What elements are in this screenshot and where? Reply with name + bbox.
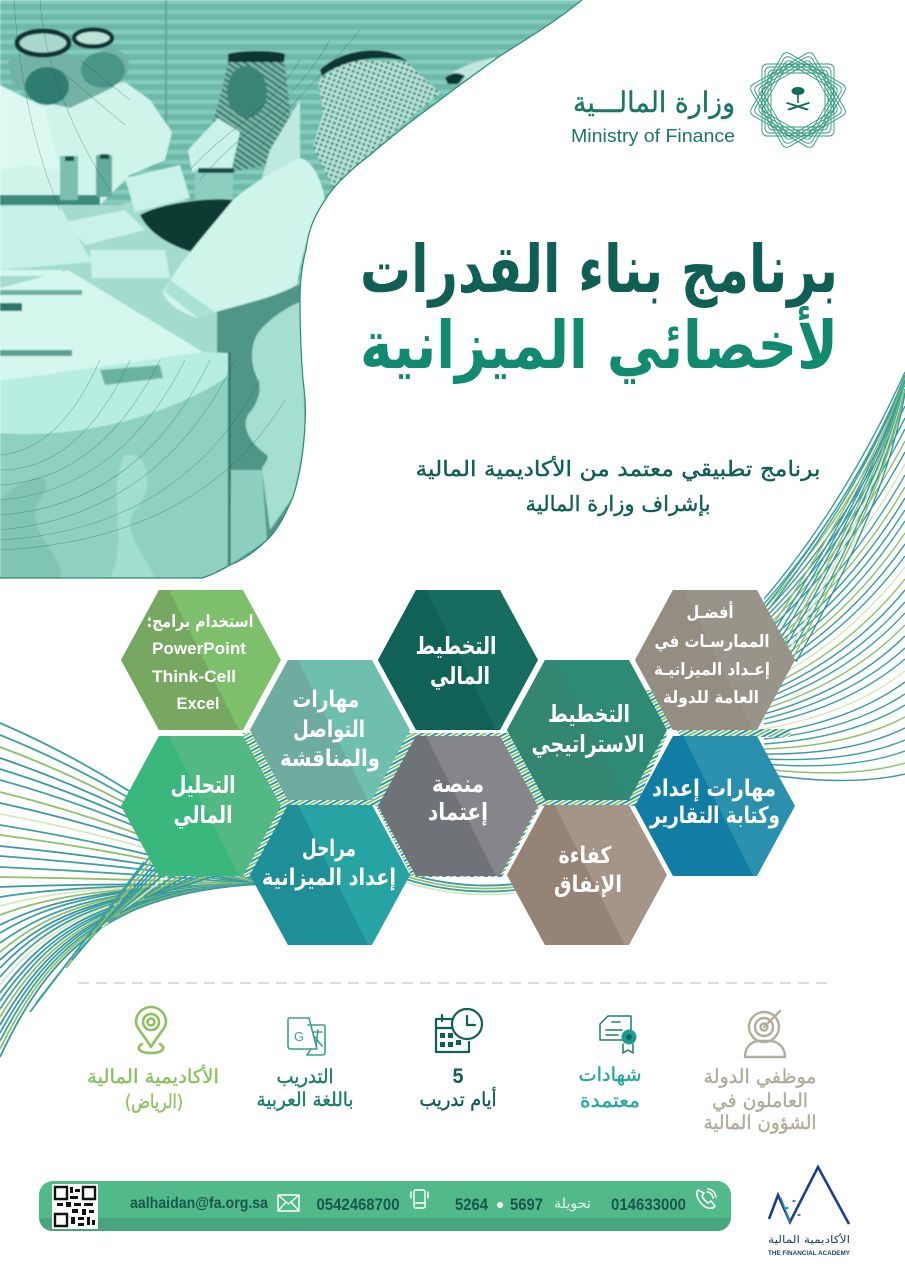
hexagon: best practices: العامة للدولة xyxy=(663,688,759,708)
chair back and dark gap xyxy=(217,285,307,575)
hexagon: strategic planning: التخطيط xyxy=(548,700,630,728)
chair shape xyxy=(246,302,305,530)
info: audience: الشؤون المالية xyxy=(704,1112,816,1134)
hexagon: best practices: إعـداد الميزانيـة xyxy=(654,660,770,680)
hexagon: strategic planning xyxy=(507,660,667,800)
logo: Financial Academy: THE FINANCIAL ACADEMY xyxy=(768,1250,851,1257)
info: duration: 5 xyxy=(452,1065,464,1088)
info: language: التدريب xyxy=(276,1066,334,1088)
icon: map pin xyxy=(136,1007,166,1053)
hexagon: best practices: أفضـل xyxy=(686,601,734,623)
thin overlay lines xyxy=(0,0,360,550)
bottles xyxy=(60,156,78,200)
hexagon: communication skills: والمناقشة xyxy=(280,746,380,772)
checked headdress xyxy=(313,60,440,187)
info: certificates: شهادات xyxy=(578,1064,642,1086)
hexagon: Etimad platform: منصة xyxy=(432,770,484,798)
palm and swords xyxy=(786,87,810,110)
hexagon: software: Excel xyxy=(176,694,220,713)
info: language: G xyxy=(294,1029,304,1044)
middle man xyxy=(212,60,290,172)
icon: calendar and clock xyxy=(436,1009,482,1052)
divider xyxy=(78,982,832,984)
info: audience xyxy=(704,1011,816,1134)
hexagon: budget stages: مراحل xyxy=(302,836,356,862)
icon: certificate xyxy=(600,1016,633,1053)
hexagon: best practices xyxy=(635,590,795,730)
hexagon: financial analysis: التحليل xyxy=(170,771,236,799)
mobile number: 0542468700 xyxy=(316,1195,400,1214)
icon: translate xyxy=(288,1018,325,1055)
Arabic name: وزارة المالـــية xyxy=(573,86,735,119)
info: location: (الرياض) xyxy=(125,1091,183,1113)
title xyxy=(360,231,838,384)
seated man's robe xyxy=(163,158,325,318)
hexagon: software: استخدام برامج: xyxy=(146,612,254,632)
hexagon: report writing: مهارات إعداد xyxy=(652,776,776,802)
landline number: 014633000 xyxy=(611,1195,686,1214)
agals xyxy=(17,31,69,55)
table dark band xyxy=(0,195,100,205)
icon: mail xyxy=(278,1195,299,1211)
hexagon: financial analysis: المالي xyxy=(174,801,232,829)
photo outline xyxy=(0,0,582,578)
round table cloth top band xyxy=(0,352,230,434)
black bag xyxy=(140,199,233,252)
hexagon: spending efficiency xyxy=(507,805,667,945)
table cloth body xyxy=(0,375,230,578)
info: certificates xyxy=(578,1016,642,1112)
blinds wall xyxy=(0,0,600,590)
icon: phone xyxy=(697,1189,716,1208)
main paper xyxy=(0,270,203,381)
hexagon: spending efficiency: كفاءة xyxy=(558,843,612,869)
left men's robes xyxy=(0,82,172,205)
stripes showing between hexagons xyxy=(243,733,668,877)
hexagon: Etimad platform xyxy=(378,736,538,876)
info: audience: العاملون في xyxy=(712,1090,808,1112)
hexagon: software: PowerPoint xyxy=(152,639,246,658)
QR code xyxy=(52,1184,98,1229)
info: certificates: معتمدة xyxy=(580,1090,640,1112)
hexagon: financial planning xyxy=(378,590,538,730)
table surface xyxy=(0,200,218,353)
icon: mobile xyxy=(411,1190,428,1208)
subtitle: برنامج تطبيقي معتمد من الأكاديمية المالية xyxy=(416,456,820,481)
hexagon: financial planning: المالي xyxy=(430,662,490,690)
hexagon: report writing xyxy=(635,736,795,876)
hexagon: communication skills: مهارات xyxy=(292,687,360,713)
decorative line fan: right xyxy=(764,372,905,780)
contact ribbon xyxy=(39,1181,731,1231)
icon: person with target xyxy=(745,1011,785,1057)
info: audience: موظفي الدولة xyxy=(704,1066,816,1088)
hexagon: spending efficiency: الإنفاق xyxy=(554,872,622,898)
hexagon: communication skills: التواصل xyxy=(293,717,365,743)
contact ribbon: تحويلة xyxy=(554,1196,591,1212)
logo: Financial Academy xyxy=(768,1167,851,1257)
subtitle: بإشراف وزارة المالية xyxy=(526,492,710,517)
hexagon: communication skills xyxy=(250,660,410,800)
hexagon: software: Think-Cell xyxy=(152,667,236,686)
info: language: باللغة العربية xyxy=(256,1089,354,1111)
contact ribbon: 5697 xyxy=(510,1195,543,1214)
info: location xyxy=(87,1007,219,1113)
subtitle xyxy=(416,456,820,517)
hexagon: financial planning: التخطيط xyxy=(416,632,496,660)
hexagon: report writing: وكتابة التقارير xyxy=(649,803,780,829)
photo: meeting participants xyxy=(0,0,600,590)
info: duration: أيام تدريب xyxy=(420,1087,496,1111)
hexagon: budget stages xyxy=(250,805,410,945)
hexagon: Etimad platform: إعتماد xyxy=(428,798,488,826)
info: duration xyxy=(420,1009,496,1111)
extensions: 5264 xyxy=(455,1195,488,1214)
hexagon: software xyxy=(121,590,281,730)
document held xyxy=(188,118,240,172)
robe right side of middle man xyxy=(260,100,300,185)
hexagon: best practices: الممارسـات في xyxy=(654,632,770,652)
hexagon: financial analysis xyxy=(121,736,281,876)
info: location: الأكاديمية المالية xyxy=(87,1065,219,1088)
emblem rosette xyxy=(749,51,847,149)
email: aalhaidan@fa.org.sa xyxy=(130,1195,268,1212)
logo: Ministry of Finance xyxy=(571,51,847,149)
info: language xyxy=(256,1018,354,1111)
hexagon: budget stages: إعداد الميزانية xyxy=(262,865,396,891)
logo: Financial Academy: الأكاديمية المالية xyxy=(768,1233,850,1246)
English name: Ministry of Finance xyxy=(571,125,735,146)
documents on table xyxy=(125,165,190,212)
headdress men xyxy=(8,48,129,108)
decorative line fan: left xyxy=(0,723,515,1057)
hexagon: strategic planning: الاستراتيجي xyxy=(532,730,644,758)
